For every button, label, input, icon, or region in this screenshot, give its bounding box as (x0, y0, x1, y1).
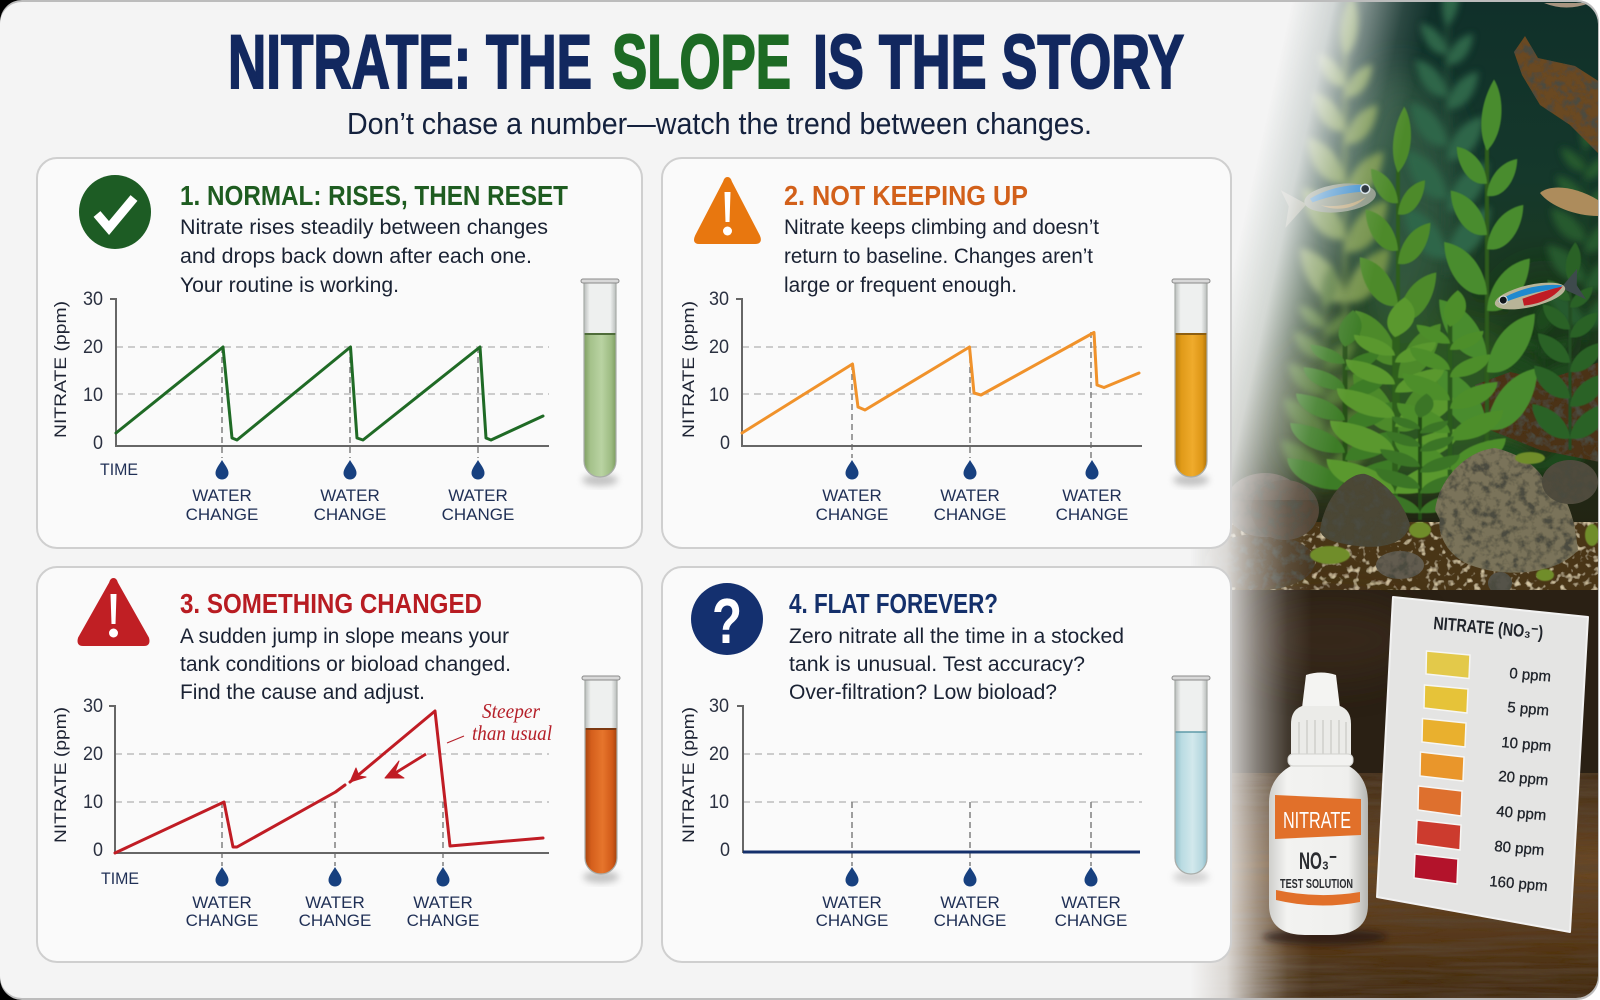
description: Nitrate rises steadily between changes (180, 216, 548, 239)
swatch labels: 5 ppm (1507, 699, 1550, 720)
description: Your routine is working. (180, 274, 399, 297)
line chart: rising baseline: 0 (720, 433, 730, 454)
line chart: steeper slope: WATER (413, 893, 473, 912)
line chart: steeper slope: CHANGE (299, 911, 371, 930)
heading: 2. NOT KEEPING UP (784, 180, 1028, 211)
plants: foreground (1287, 79, 1600, 520)
line chart: rising baseline: WATER (1062, 486, 1122, 505)
callout: steeper than usual: Steeper (482, 699, 541, 723)
line chart: steeper slope (51, 696, 549, 930)
line chart: flat zero: 0 (720, 840, 730, 861)
line chart: flat zero: CHANGE (816, 911, 888, 930)
title (228, 20, 1184, 105)
line chart: rising baseline: CHANGE (1056, 505, 1128, 524)
line chart: steeper slope: CHANGE (407, 911, 479, 930)
line chart: rising baseline: 30 (709, 289, 729, 310)
callout: steeper than usual (350, 699, 552, 782)
wooden table (1180, 773, 1600, 1000)
heading: 3. SOMETHING CHANGED (180, 588, 482, 619)
line chart: flat zero: CHANGE (934, 911, 1006, 930)
color swatches (1414, 651, 1470, 884)
icon: orange warning (695, 178, 760, 243)
line chart: sawtooth: CHANGE (442, 505, 514, 524)
description: return to baseline. Changes aren’t (784, 245, 1093, 268)
line chart: rising baseline (679, 289, 1142, 524)
line chart: steeper slope: WATER (192, 893, 252, 912)
line chart: steeper slope: 20 (83, 744, 103, 765)
back wall behind kit (1232, 590, 1598, 773)
line chart: rising baseline: 20 (709, 337, 729, 358)
title: NITRATE: THE (228, 20, 592, 105)
line chart: rising baseline: WATER (940, 486, 1000, 505)
label band (1275, 795, 1361, 839)
panel: 3 something changed (37, 567, 642, 962)
color reference card (1377, 597, 1588, 932)
line chart: sawtooth: WATER (320, 486, 380, 505)
plants: background stems (1282, 0, 1600, 490)
bottle body (1269, 762, 1368, 935)
moss (1310, 452, 1599, 581)
line chart: steeper slope: 30 (83, 696, 103, 717)
line chart: sawtooth: 20 (83, 337, 103, 358)
line chart: flat zero: 10 (709, 792, 729, 813)
line chart: flat zero: WATER (822, 893, 882, 912)
description: and drops back down after each one. (180, 245, 532, 268)
line chart: sawtooth: CHANGE (314, 505, 386, 524)
swatch labels (1489, 665, 1552, 895)
card title: NITRATE (NO₃⁻) (1433, 613, 1544, 643)
arrow: pointing to slope (350, 754, 426, 782)
fish: tan right (1540, 188, 1598, 216)
swatch labels: 10 ppm (1501, 734, 1552, 755)
line chart: sawtooth: NITRATE (ppm) (51, 301, 70, 438)
line chart: steeper slope: WATER (305, 893, 365, 912)
description: Find the cause and adjust. (180, 681, 425, 704)
panel: 4 flat forever (662, 567, 1231, 962)
line chart: flat zero: 30 (709, 696, 729, 717)
fish: tetra left (1281, 183, 1376, 228)
panel: 1 normal (37, 158, 642, 548)
line chart: rising baseline: 10 (709, 385, 729, 406)
line chart: rising baseline: WATER (822, 486, 882, 505)
swatch labels: 0 ppm (1509, 665, 1552, 686)
line chart: rising baseline: CHANGE (934, 505, 1006, 524)
test solution bottle: NITRATE (1283, 807, 1351, 833)
description: Nitrate keeps climbing and doesn’t (784, 216, 1099, 239)
icon: blue question: ? (712, 585, 742, 657)
line chart: sawtooth: WATER (192, 486, 252, 505)
driftwood: upper (1514, 36, 1600, 155)
swatch labels: 20 ppm (1498, 768, 1549, 789)
test tube: orange (582, 676, 620, 883)
line chart: flat zero (679, 696, 1142, 930)
icon: red warning (78, 579, 148, 645)
driftwood: lower (1475, 362, 1600, 462)
line chart: steeper slope: NITRATE (ppm) (51, 707, 70, 843)
line chart: flat zero: NITRATE (ppm) (679, 707, 698, 843)
description (784, 216, 1099, 297)
description: tank is unusual. Test accuracy? (789, 653, 1085, 676)
line chart: steeper slope: CHANGE (186, 911, 258, 930)
subtitle: Don’t chase a number—watch the trend between changes. (347, 106, 1092, 141)
rocks (1225, 448, 1598, 594)
foliage glow (1268, 63, 1536, 506)
title: IS THE STORY (813, 20, 1184, 105)
white fade (1180, 2, 1425, 998)
description: Over-filtration? Low bioload? (789, 681, 1057, 704)
line chart: sawtooth (51, 289, 549, 524)
test tube: green (581, 279, 619, 486)
description (180, 625, 511, 704)
line chart: flat zero: WATER (1061, 893, 1121, 912)
swatch labels: 80 ppm (1494, 838, 1545, 859)
line chart: sawtooth: CHANGE (186, 505, 258, 524)
swatch labels: 40 ppm (1496, 803, 1547, 824)
line chart: flat zero: 20 (709, 744, 729, 765)
title: SLOPE (612, 20, 791, 105)
line chart: flat zero: CHANGE (1055, 911, 1127, 930)
description: A sudden jump in slope means your (180, 625, 509, 648)
description (180, 216, 548, 297)
test solution bottle: TEST SOLUTION (1280, 876, 1353, 891)
test solution bottle (1263, 672, 1387, 945)
bottle cap (1288, 672, 1353, 766)
description (789, 625, 1124, 704)
line chart: rising baseline: NITRATE (ppm) (679, 301, 698, 438)
swatch labels: 160 ppm (1489, 873, 1548, 895)
line chart: sawtooth: WATER (448, 486, 508, 505)
line chart: sawtooth: 0 (93, 433, 103, 454)
line chart: steeper slope: 10 (83, 792, 103, 813)
line chart: steeper slope: TIME (101, 869, 139, 888)
fish: neon right (1494, 269, 1586, 310)
callout: steeper than usual: than usual (472, 721, 552, 745)
fish: top right (1544, 3, 1590, 8)
line chart: sawtooth: 30 (83, 289, 103, 310)
test tube: pale blue (1172, 676, 1210, 883)
line chart: sawtooth: 10 (83, 385, 103, 406)
description: large or frequent enough. (784, 274, 1017, 297)
line chart: steeper slope: 0 (93, 840, 103, 861)
panel: 2 not keeping up (662, 158, 1231, 548)
description: tank conditions or bioload changed. (180, 653, 511, 676)
heading: 1. NORMAL: RISES, THEN RESET (180, 180, 568, 211)
gravel bed (1210, 522, 1600, 592)
test tube: amber (1172, 279, 1210, 486)
line chart: sawtooth: TIME (100, 460, 138, 479)
line chart: flat zero: WATER (940, 893, 1000, 912)
heading: 4. FLAT FOREVER? (789, 588, 998, 619)
line chart: rising baseline: CHANGE (816, 505, 888, 524)
icon: green check (79, 175, 151, 249)
icon: blue question (691, 583, 763, 657)
description: Zero nitrate all the time in a stocked (789, 625, 1124, 648)
test solution bottle: NO₃⁻ (1299, 848, 1337, 875)
